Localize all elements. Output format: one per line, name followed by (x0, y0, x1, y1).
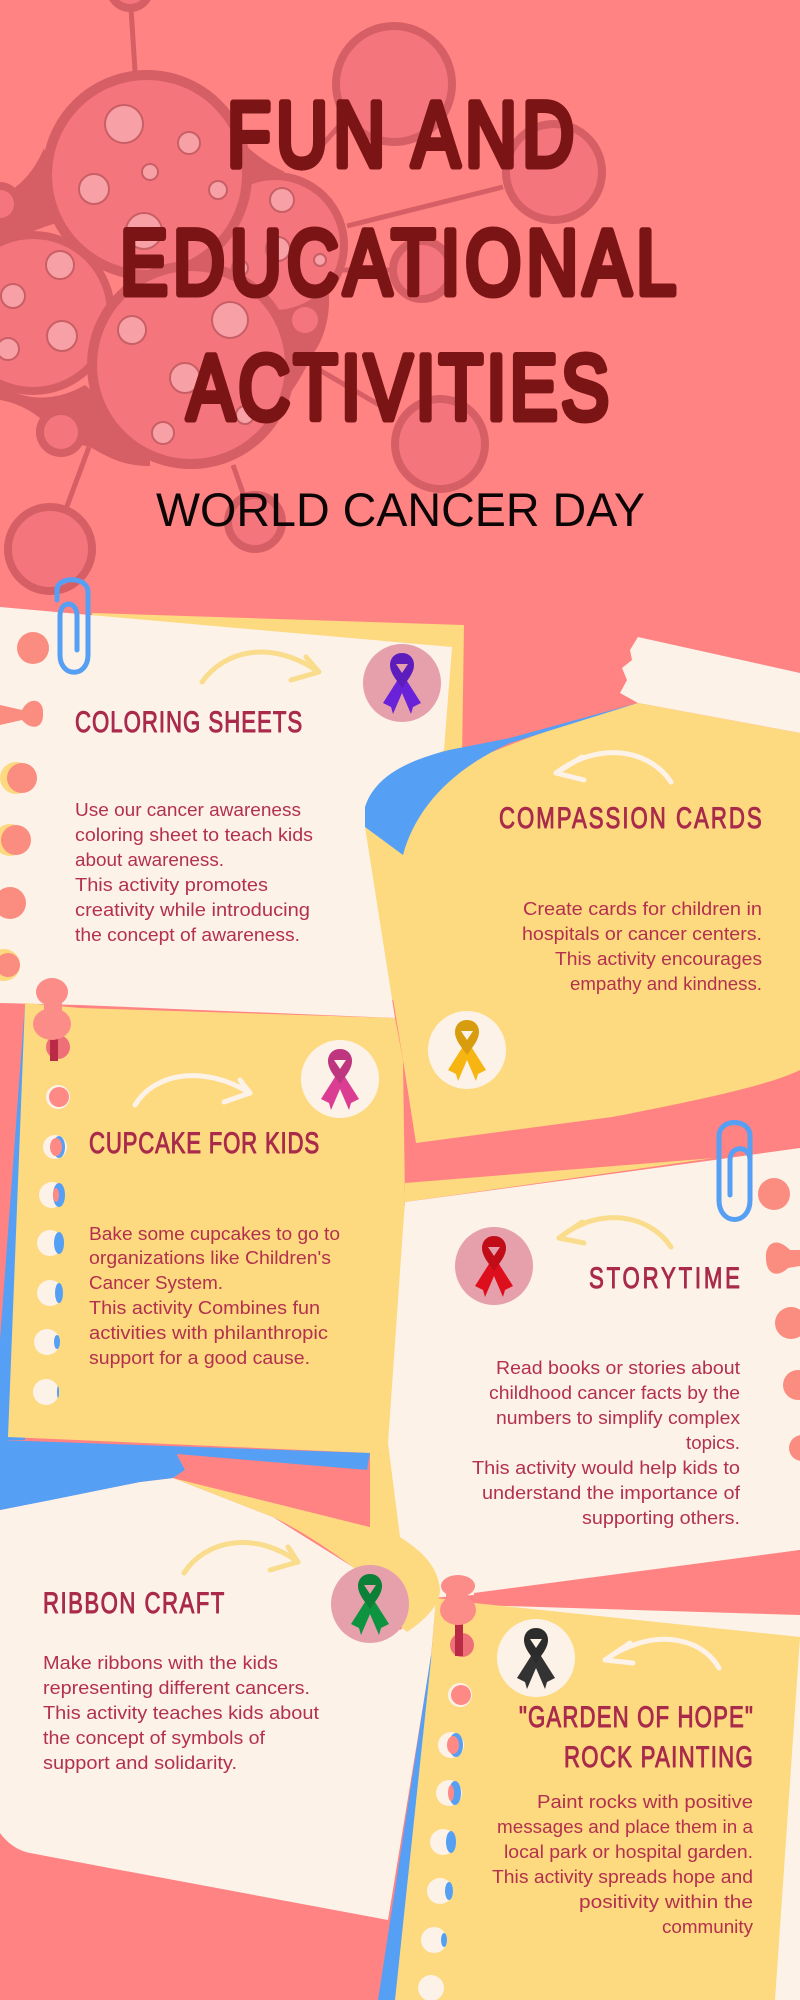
panel: storytime sheet (370, 1057, 800, 1600)
heading: garden of hope rock painting: "GARDEN OF HOPE" (519, 1700, 753, 1734)
text: ribbon craft (43, 1653, 319, 1773)
heading: cupcake for kids: CUPCAKE FOR KIDS (89, 1126, 319, 1160)
title: FUN AND (227, 83, 574, 186)
icon: purple ribbon (363, 644, 441, 722)
panel: compassion cards (365, 637, 800, 1143)
text: coloring sheets (75, 800, 313, 945)
text: compassion cards: hospitals or cancer centers. (522, 924, 762, 944)
heading: garden of hope rock painting (519, 1700, 753, 1774)
text: storytime: childhood cancer facts by the (489, 1383, 740, 1403)
panel: cupcake for kids (0, 1003, 405, 1453)
heading: coloring sheets: COLORING SHEETS (75, 705, 302, 739)
text: storytime: supporting others. (582, 1508, 740, 1528)
text: ribbon craft: the concept of symbols of (43, 1728, 266, 1748)
yellow strip and ribbon mount (173, 1440, 440, 1632)
text: storytime: topics. (686, 1433, 740, 1453)
arrow: compassion cards (556, 753, 671, 782)
subtitle: WORLD CANCER DAY (156, 483, 645, 536)
heading: garden of hope rock painting: ROCK PAINTING (564, 1740, 753, 1774)
text: storytime (472, 1358, 741, 1528)
arrow: ribbon craft (184, 1542, 298, 1573)
text: storytime: numbers to simplify complex (496, 1408, 740, 1428)
text: garden of hope rock painting (492, 1792, 754, 1937)
text: ribbon craft: Make ribbons with the kids (43, 1653, 278, 1673)
text: compassion cards: This activity encourages (555, 949, 762, 969)
text: garden of hope rock painting: local park or hospital garden. (504, 1842, 753, 1862)
icon: green ribbon (331, 1565, 409, 1643)
text: cupcake for kids (89, 1224, 340, 1368)
pin: cupcake sheet (33, 978, 71, 1061)
text: cupcake for kids: activities with philanthropic (89, 1323, 328, 1343)
heading: compassion cards: COMPASSION CARDS (499, 801, 762, 835)
text: cupcake for kids: organizations like Children's (89, 1248, 331, 1268)
text: storytime: This activity would help kids to (472, 1458, 740, 1478)
icon: gold ribbon (428, 1011, 506, 1089)
text: coloring sheets: This activity promotes (75, 875, 268, 895)
text: garden of hope rock painting: messages and place them in a (497, 1817, 754, 1837)
blue page fold (365, 703, 638, 855)
yellow sheet (365, 703, 800, 1143)
text: cupcake for kids: This activity Combines fun (89, 1298, 320, 1318)
text: compassion cards: Create cards for children in (523, 899, 762, 919)
text: garden of hope rock painting: positivity within the (579, 1892, 753, 1912)
arrow: coloring sheets (202, 652, 319, 682)
text: cupcake for kids: Bake some cupcakes to go to (89, 1224, 340, 1244)
text: storytime: understand the importance of (482, 1483, 741, 1503)
text: coloring sheets: coloring sheet to teach kids (75, 825, 313, 845)
arrow: storytime (559, 1218, 671, 1247)
molecule illustration (0, 0, 602, 591)
text: garden of hope rock painting: This activity spreads hope and (492, 1867, 753, 1887)
torn tape (620, 637, 800, 733)
panel: coloring sheets (0, 607, 464, 1018)
text: compassion cards: empathy and kindness. (570, 974, 762, 994)
icon: red ribbon (455, 1227, 533, 1305)
text: coloring sheets: about awareness. (75, 850, 224, 870)
arrow: garden of hope (605, 1639, 719, 1668)
text: garden of hope rock painting: community (662, 1917, 753, 1937)
panel: ribbon craft (0, 1478, 436, 1920)
title: ACTIVITIES (187, 336, 609, 439)
text: coloring sheets: creativity while introducing (75, 900, 310, 920)
text: coloring sheets: Use our cancer awareness (75, 800, 301, 820)
text: storytime: Read books or stories about (496, 1358, 740, 1378)
text: ribbon craft: support and solidarity. (43, 1753, 237, 1773)
heading: storytime: STORYTIME (589, 1261, 740, 1295)
heading: ribbon craft: RIBBON CRAFT (43, 1586, 224, 1620)
text: ribbon craft: representing different cancers. (43, 1678, 310, 1698)
paperclip: coloring sheets (57, 580, 88, 672)
title (120, 83, 676, 439)
text: coloring sheets: the concept of awareness. (75, 925, 300, 945)
paperclip: storytime (719, 1122, 750, 1220)
text: cupcake for kids: support for a good cause. (89, 1348, 310, 1368)
text: ribbon craft: This activity teaches kids about (43, 1703, 319, 1723)
binder holes: coloring sheets (0, 632, 49, 981)
text: compassion cards (522, 899, 762, 994)
text: garden of hope rock painting: Paint rocks with positive (537, 1792, 753, 1812)
salmon torn piece (173, 1454, 370, 1527)
binder holes: garden of hope (418, 1683, 472, 2000)
pin: garden of hope (440, 1575, 476, 1657)
molecule webbing (0, 140, 329, 466)
blue torn band (0, 1440, 370, 1510)
text: cupcake for kids: Cancer System. (89, 1273, 223, 1293)
binder holes: cupcake sheet (33, 1085, 70, 1405)
panel: garden of hope (378, 1550, 800, 2000)
arrow: cupcake for kids (135, 1076, 250, 1105)
binder holes: storytime (758, 1178, 800, 1461)
icon: black ribbon (497, 1619, 575, 1697)
icon: pink ribbon (301, 1040, 379, 1118)
title: EDUCATIONAL (120, 211, 676, 314)
